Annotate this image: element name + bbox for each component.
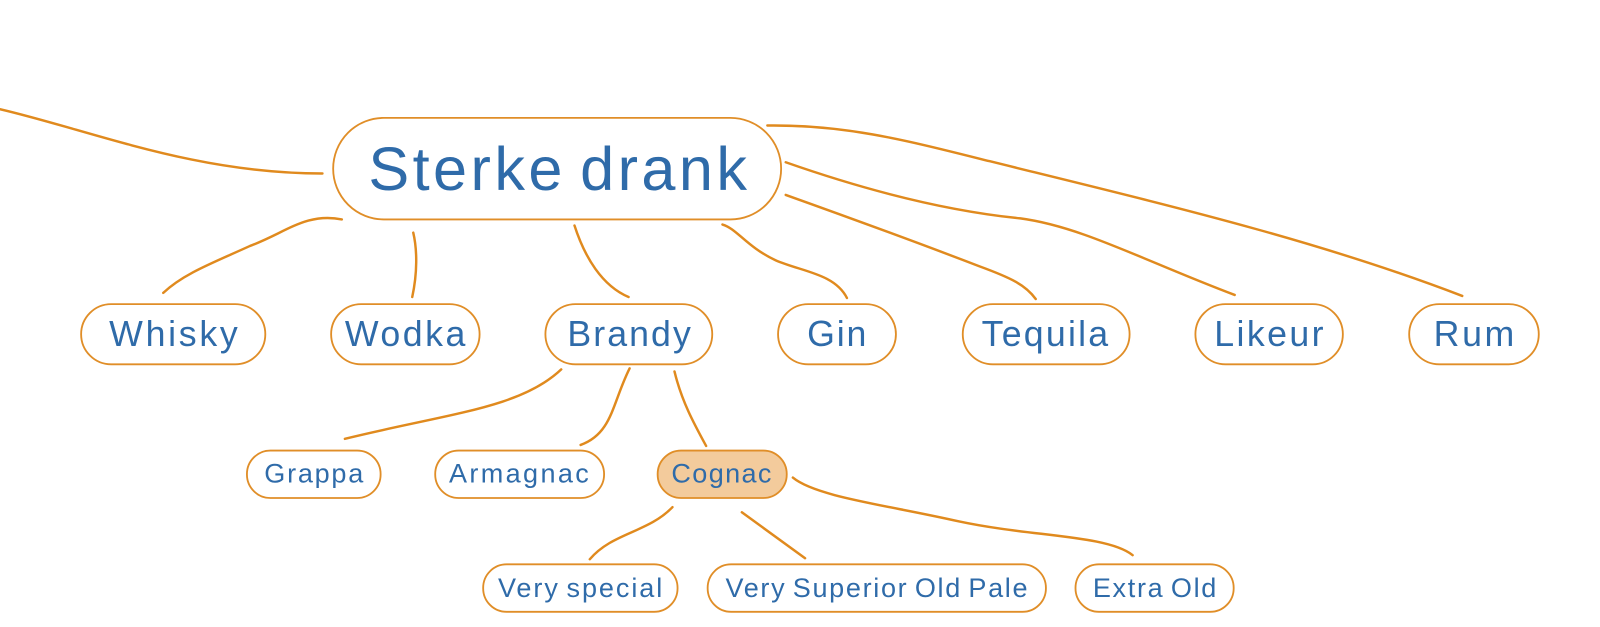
node: Cognac (highlighted): Cognac <box>671 459 771 489</box>
connector: Sterke drank to Likeur <box>786 162 1235 295</box>
node: Extra Old: Extra Old <box>1093 573 1216 603</box>
node: Very special <box>483 564 678 612</box>
connector: off-page to Sterke drank <box>0 109 322 173</box>
node: Very Superior Old Pale: Very Superior Old Pale <box>726 573 1028 603</box>
connector: Brandy to Grappa <box>345 369 561 439</box>
node: Likeur <box>1195 304 1343 364</box>
node: Whisky: Whisky <box>109 314 238 354</box>
node: Extra Old <box>1076 564 1234 612</box>
connector: Sterke drank to Wodka <box>412 233 416 297</box>
node: Very special: Very special <box>498 573 662 603</box>
connector: Brandy to Armagnac <box>581 368 630 445</box>
node: Cognac (highlighted) <box>658 451 787 498</box>
connector: Cognac to Extra Old <box>793 478 1133 555</box>
node: Gin: Gin <box>807 314 866 354</box>
connector: Brandy to Cognac <box>674 371 706 446</box>
node: Very Superior Old Pale <box>708 564 1046 612</box>
node: Armagnac: Armagnac <box>449 459 589 489</box>
node: Tequila <box>963 304 1130 364</box>
node: Rum: Rum <box>1434 314 1514 354</box>
node: Sterke drank: Sterke drank <box>368 135 747 203</box>
node: Whisky <box>81 304 265 364</box>
connector: Sterke drank to Brandy <box>574 226 629 297</box>
node: Brandy <box>545 304 712 364</box>
node: Gin <box>778 304 896 364</box>
connector: Sterke drank to Gin <box>722 225 847 298</box>
connector: Sterke drank to Tequila <box>786 195 1036 299</box>
node: Armagnac <box>435 451 604 498</box>
connector: Cognac to Very special <box>590 507 672 559</box>
node: Brandy: Brandy <box>567 314 691 354</box>
node: Rum <box>1409 304 1539 364</box>
node: Wodka <box>331 304 480 364</box>
connector: Cognac to Very Superior Old Pale <box>742 512 805 558</box>
node: Sterke drank <box>333 118 781 219</box>
node: Grappa: Grappa <box>264 459 364 489</box>
node: Likeur: Likeur <box>1214 314 1324 354</box>
node: Wodka: Wodka <box>345 314 465 354</box>
node: Tequila: Tequila <box>982 314 1108 354</box>
connector: Sterke drank to Whisky <box>163 218 342 293</box>
connector: Sterke drank to Rum <box>767 125 1462 296</box>
node: Grappa <box>247 451 381 498</box>
